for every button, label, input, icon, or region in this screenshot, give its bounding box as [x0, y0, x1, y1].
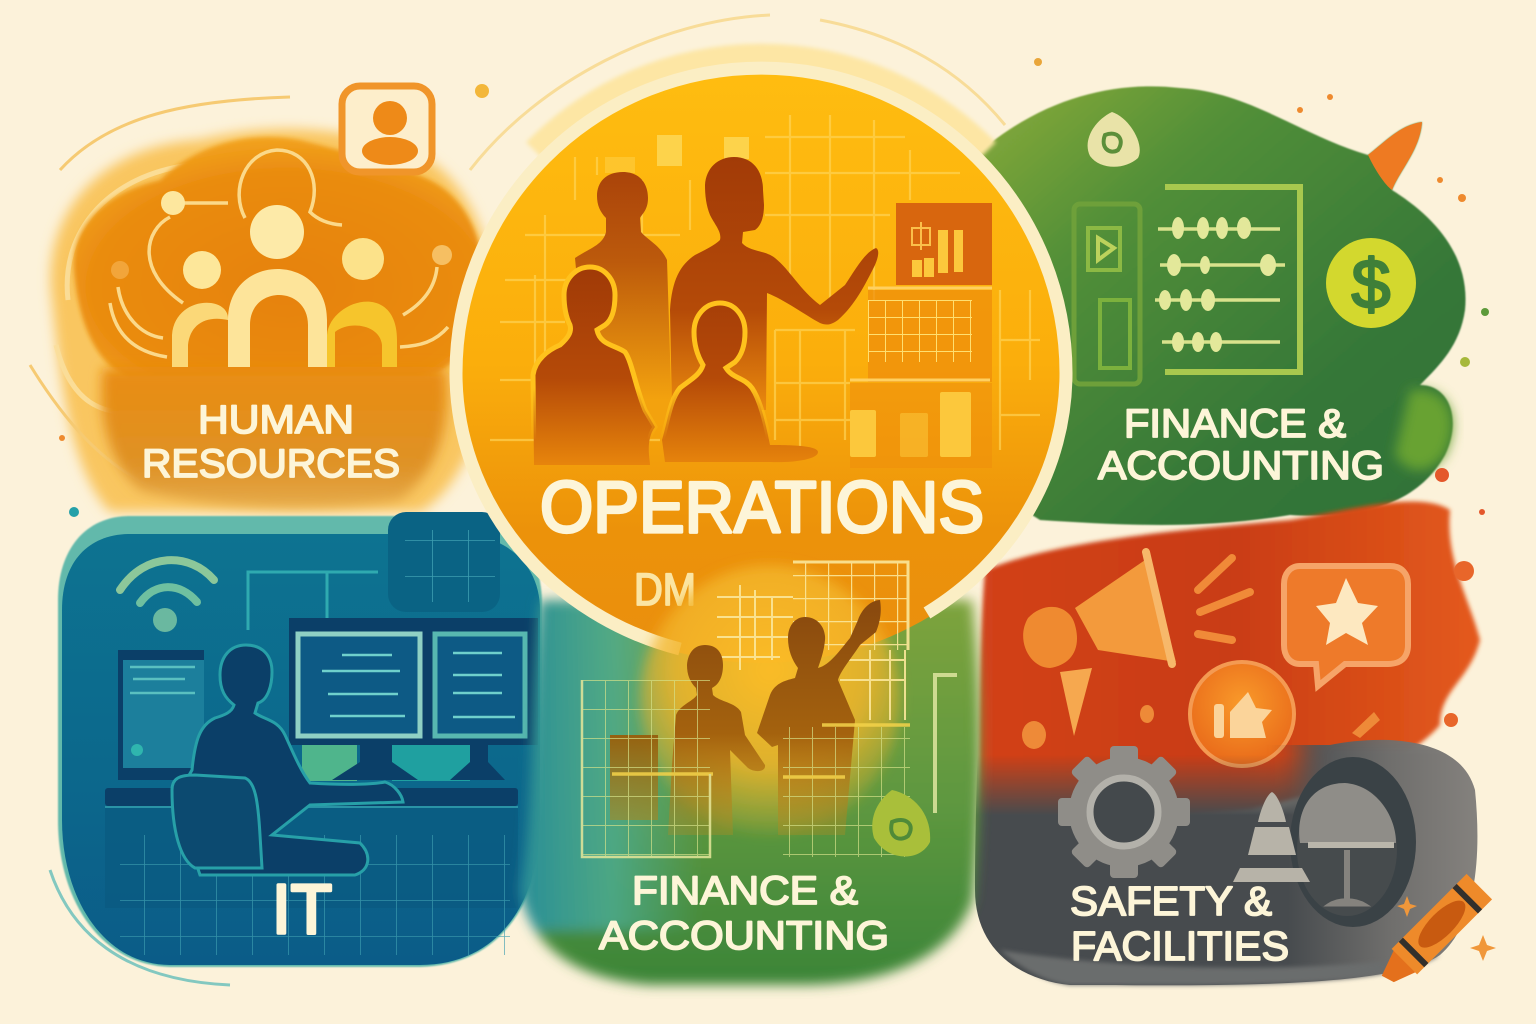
figures: two people at board [668, 600, 881, 835]
heading: safety and facilities [1070, 878, 1289, 969]
heading: finance bottom [599, 869, 889, 958]
icon: traffic cone [1233, 792, 1310, 882]
figure: person at desk [172, 645, 403, 875]
heading: human resources [142, 398, 400, 486]
icon: gear [1058, 746, 1190, 878]
central golden glow [640, 565, 900, 835]
panel: finance and accounting right [960, 86, 1466, 525]
panel: it [50, 512, 542, 985]
heading: finance right: ACCOUNTING [1098, 444, 1384, 488]
decorative paint splatter [59, 58, 1489, 727]
grid backdrop top right [388, 512, 500, 612]
icon: twin monitors [289, 618, 538, 780]
icon: profile badge [342, 86, 432, 172]
heading: safety and facilities: FACILITIES [1071, 923, 1289, 969]
label: dm: DM [634, 564, 696, 615]
cream ring [456, 68, 1066, 649]
icon: wifi [120, 560, 214, 632]
panel: finance backdrop [510, 590, 990, 990]
icon: safety helmet [1290, 757, 1416, 927]
panel: human resources [30, 86, 496, 512]
heading: operations: OPERATIONS [540, 468, 984, 548]
chart wall [850, 203, 992, 468]
heading: finance right: FINANCE & [1124, 402, 1346, 446]
icon: megaphone [1023, 552, 1250, 736]
heading: human resources: HUMAN [198, 398, 354, 442]
block [610, 735, 658, 820]
heading: finance bottom: FINANCE & [632, 869, 858, 913]
lighter bottom edge [1000, 950, 1440, 985]
icon: side screen [118, 650, 204, 780]
icon: people network [110, 150, 452, 367]
heading: safety and facilities: SAFETY & [1070, 878, 1272, 924]
icon: ledger and abacus [1074, 187, 1300, 384]
outer pale swirl [50, 129, 496, 512]
icon: thumbs up badge [1190, 662, 1294, 766]
icon: shield emblem [1088, 112, 1140, 167]
heading: finance right [1098, 402, 1384, 488]
lower right grid [783, 675, 957, 857]
panel: marketing red [978, 501, 1480, 825]
paint splotches [1022, 705, 1380, 749]
icon: dollar coin [1326, 238, 1416, 328]
wall notes [605, 135, 749, 173]
panel: operations [450, 15, 1072, 663]
panel: finance and accounting bottom [582, 562, 957, 958]
green and teal glow patches [302, 745, 470, 781]
panel: safety and facilities [975, 740, 1477, 985]
icon: green shield [872, 790, 930, 857]
bracket line [248, 572, 378, 630]
lower left grid [582, 680, 713, 857]
heading: finance bottom: ACCOUNTING [599, 914, 889, 958]
desk [105, 788, 518, 955]
wall grid lines [490, 115, 1040, 450]
heading: it: IT [272, 870, 332, 948]
main orange blob [74, 137, 483, 378]
icon: crayon [1373, 874, 1496, 993]
heading: human resources: RESOURCES [142, 442, 400, 486]
lower text band [102, 368, 447, 507]
figures: team silhouettes [533, 157, 878, 465]
outer halo [534, 55, 988, 150]
wall chart grids [717, 562, 908, 720]
icon: dollar coin: $ [1352, 245, 1390, 323]
grey body fading up into red [975, 740, 1477, 985]
icon: star speech bubble [1284, 566, 1408, 686]
circle fill [450, 62, 1072, 663]
